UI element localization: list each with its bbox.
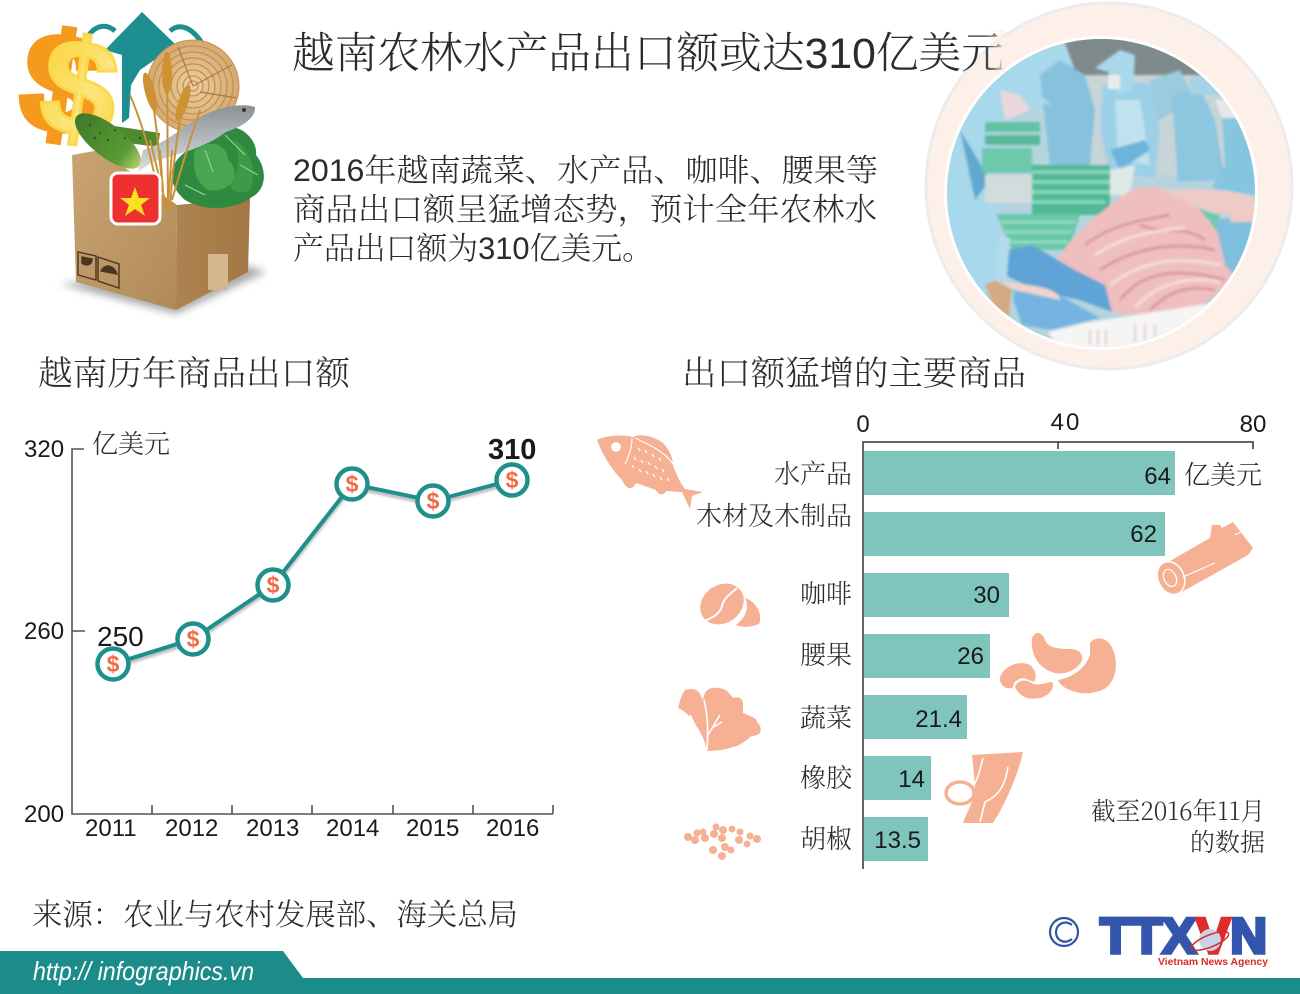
intro text: 商品出口额呈猛增态势，预计全年农林水 [293,185,877,230]
copyright symbol [1050,918,1078,946]
dollar marks: $ [427,488,440,514]
source: 来源：农业与农村发展部、海关总局 [32,890,518,934]
icon: cashews [1000,633,1116,699]
title: 越南农林水产品出口额或达310亿美元 [292,20,1004,81]
scale labels: 40 [1051,409,1081,436]
icon: lettuce [678,688,761,751]
icon: coffee beans [692,575,760,633]
icon: Vietnam flag sticker [111,173,160,224]
icon: handling marks [78,252,119,288]
icon: log [1152,522,1253,599]
bar values: 64 [1144,463,1171,490]
icon: lettuce [172,127,264,208]
icon: fish [597,435,703,509]
category labels: 咖啡 [800,574,852,611]
x axis labels: 2014 [326,815,379,842]
footer band [0,951,1300,994]
heading: main goods: 出口额猛增的主要商品 [682,346,1026,395]
dollar marks: $ [346,471,359,497]
icon: wheat [130,52,200,210]
category labels: 胡椒 [800,819,852,856]
logo: TTXVN: Vietnam News Agency [1158,956,1268,968]
bar values: 13.5 [874,827,921,854]
value 310: 310 [488,434,536,466]
bar values: 21.4 [915,706,962,733]
bar values [874,463,1171,854]
category labels: 蔬菜 [800,698,852,735]
dollar marks: $ [187,626,200,652]
icon: export box with goods [13,3,266,314]
data note: 的数据 [1190,823,1265,859]
intro text [293,146,878,269]
logo: TTXVN: TTXVN [1100,908,1267,964]
intro text: 2016年越南蔬菜、水产品、咖啡、腰果等 [293,146,878,191]
x axis labels: 2011 [85,815,137,842]
title fade at photo edge [984,30,1004,72]
scale labels [856,409,1266,438]
icon: dollar sign: $ [13,3,109,164]
white basket [1048,302,1209,347]
heading: yearly exports: 越南历年商品出口额 [38,346,350,395]
photo ring: seafood processing workers [926,3,1292,369]
icon: dollar sign: $ [32,7,128,168]
dollar marks: $ [506,467,519,493]
category labels: 橡胶 [800,758,853,795]
unit: 亿美元 [92,424,170,461]
data note: 截至2016年11月 [1091,792,1265,828]
scale labels: 0 [856,411,870,438]
icon: rubber [946,752,1023,823]
category labels: 腰果 [800,635,852,672]
x axis labels: 2013 [246,815,299,842]
green baskets [985,122,1040,132]
bar values: 26 [957,643,984,670]
category labels: 水产品 [774,454,852,491]
center worker [1100,82,1160,178]
dollar marks: $ [107,651,120,677]
data note [1091,792,1265,859]
website url: http:// infographics.vn [33,956,254,986]
x axis labels: 2016 [486,815,539,842]
x axis labels [85,815,539,842]
blue gloves [1005,245,1112,312]
y axis labels [24,436,64,828]
icon: wood slice [147,40,239,132]
dollar marks [107,467,519,677]
fish fillet pile [1055,187,1235,315]
unit: 亿美元 [1184,455,1262,492]
intro text: 产品出口额为310亿美元。 [293,224,653,269]
bar values: 14 [898,766,925,793]
y axis labels: 260 [24,618,64,645]
y axis labels: 200 [24,801,64,828]
axis [863,442,1253,869]
dollar marks: $ [267,572,280,598]
value 250: 250 [97,621,144,652]
icon: peppercorns [684,824,761,860]
box body [72,150,177,310]
bars [864,451,1175,861]
data points [98,464,528,680]
bar chart [696,409,1266,869]
axes [72,449,553,814]
background workers [1040,60,1095,165]
x axis labels: 2015 [406,815,459,842]
bar values: 30 [973,582,1000,609]
category labels [696,454,853,856]
y axis labels: 320 [24,436,64,463]
icon: cucumber [67,104,160,178]
foreground left worker [947,98,1051,301]
bar values: 62 [1130,521,1157,548]
x axis labels: 2012 [165,815,218,842]
scale labels: 80 [1240,411,1266,438]
trend line [113,483,512,667]
category labels: 木材及木制品 [696,496,852,533]
icon: fish [138,105,255,172]
line chart [24,424,553,842]
icon: up arrow [85,12,202,123]
